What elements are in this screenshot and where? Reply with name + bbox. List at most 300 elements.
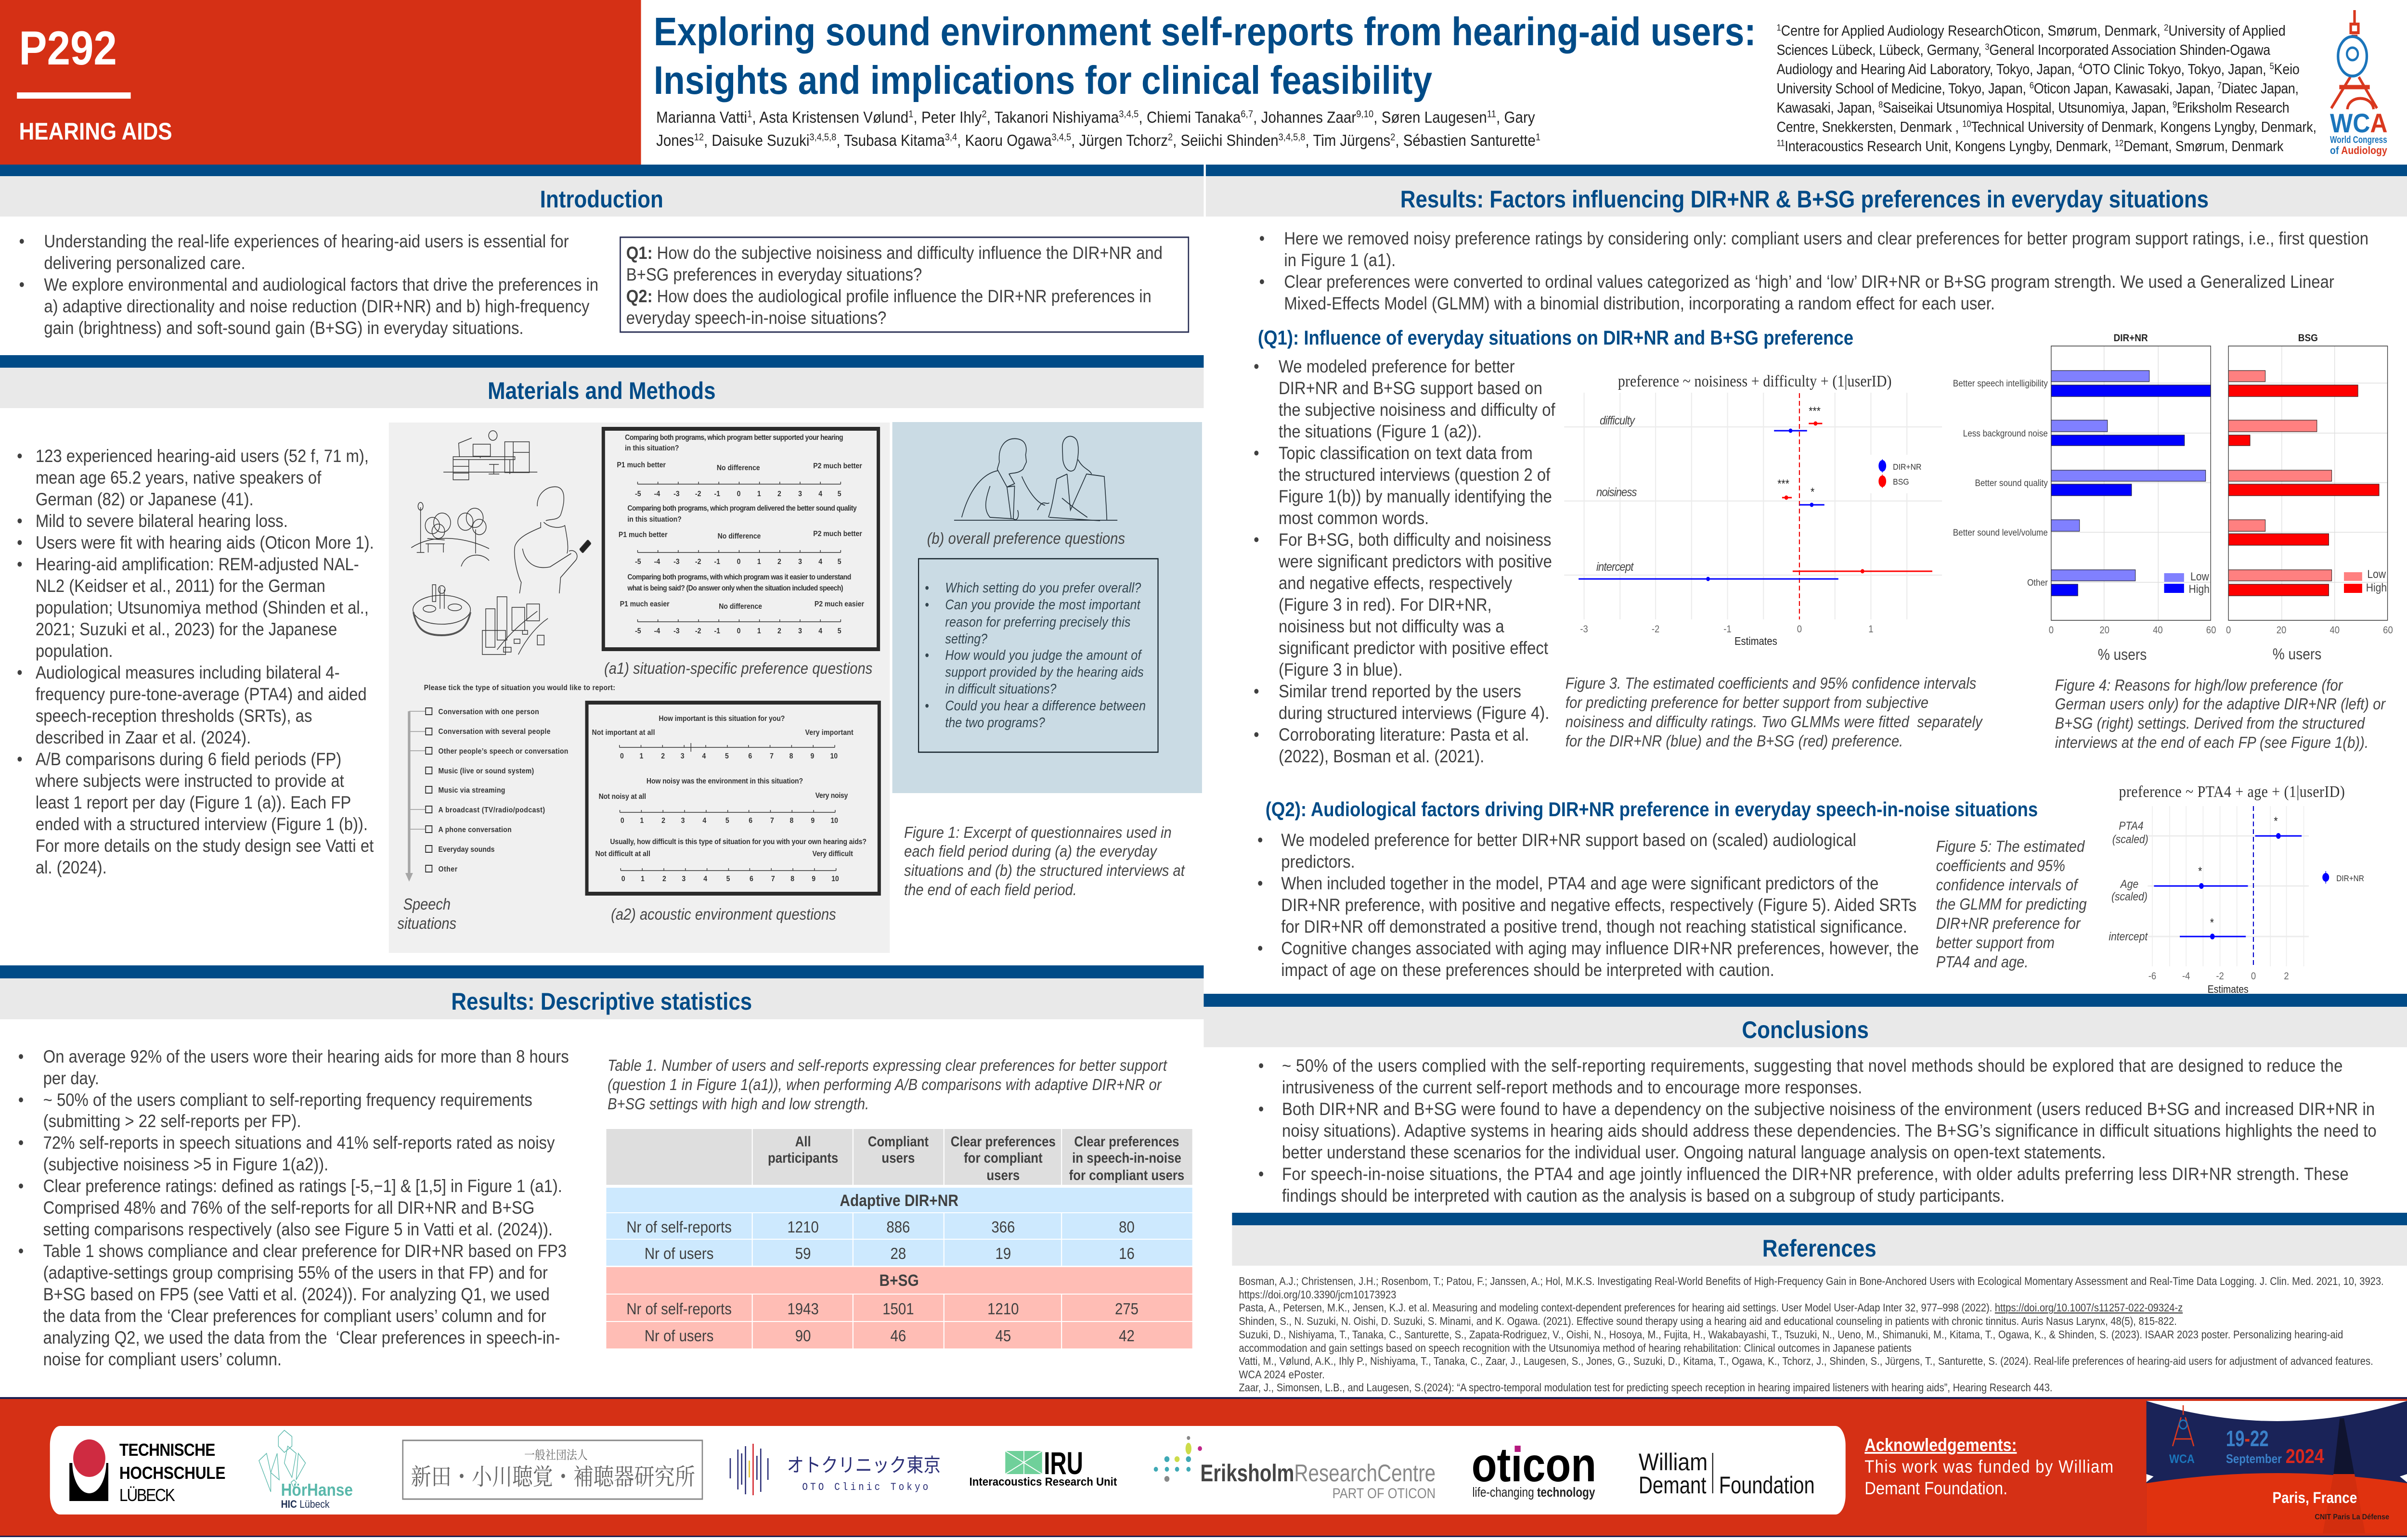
figure 1a: questionnaire panel (389, 423, 890, 953)
methods bullets: NL2 (Keidser et al., 2011) for the German (36, 576, 325, 596)
authors: Jones12, Daisuke Suzuki3,4,5,8, Tsubasa Kitama3,4, Kaoru Ogawa3,4,5, Jürgen Tchorz2, Seiichi Shinden3,4,5,8, Tim Jürgens2, Sébastien Santurette1 (656, 131, 1540, 149)
speech situation checklist: Conversation with several people (439, 727, 550, 736)
reference list: Vatti, M., Vølund, A.K., Ihly P., Nishiyama, T., Tanaka, C., Zaar, J., Laugesen, S., Jones, G., Suzuki, D., Kitama, T., Ogawa, K., Tchorz, J., Shinden, S., Jürgens, T., Santurette, S. (2024). Real-life preferences of hearing-aid users for adjustment of advanced features. (1239, 1355, 2373, 1367)
methods bullets: For more details on the study design see Vatti et (36, 836, 374, 856)
axis labels: -6 (2148, 971, 2156, 982)
questionnaire a1 frame: -1 (714, 489, 720, 498)
questionnaire a2 frame: 5 (726, 874, 730, 883)
logo: TH Lübeck: TECHNISCHE (119, 1440, 215, 1460)
caption b: (b) overall preference questions (927, 529, 1125, 547)
figure 4 caption: B+SG (right) settings. Derived from the structured (2055, 714, 2366, 732)
questionnaire a1 frame: 5 (838, 489, 841, 498)
table 1: Clear preferences (951, 1133, 1056, 1149)
questionnaire a1 frame: 2 (777, 489, 781, 498)
statistics bullets: Table 1 shows compliance and clear preference for DIR+NR based on FP3 (43, 1241, 567, 1261)
questionnaire a2 frame: How important is this situation for you? (659, 714, 785, 723)
row labels: (scaled) (2112, 833, 2148, 846)
figure 4 caption: interviews at the end of each FP (see Figure 1(b)). (2055, 733, 2368, 751)
questionnaire a2 frame: 8 (790, 874, 794, 883)
figure 5 caption: Figure 5: The estimated (1936, 837, 2085, 855)
questionnaire a1 frame: -3 (673, 627, 680, 635)
speech situation checklist: Other (439, 865, 457, 873)
questionnaire a1 frame: 4 (818, 627, 823, 635)
table 1: 1501 (882, 1300, 914, 1318)
icon: WCA congress logo: World Congress (2330, 134, 2387, 145)
logo: Eriksholm Research Centre: PART OF OTICON (1333, 1485, 1436, 1501)
table 1: Nr of users (645, 1327, 713, 1345)
table 1: 1210 (787, 1218, 819, 1236)
questionnaire a2 frame: 4 (703, 874, 708, 883)
Q1 bullets: noisiness but not difficulty was a (1279, 616, 1504, 636)
questionnaire a1 frame: 0 (737, 557, 740, 566)
table 1: 886 (886, 1218, 910, 1236)
conclusions bullets: For speech-in-noise situations, the PTA4 and age jointly influenced the DIR+NR preference, with older adults preferring less DIR+NR strength. These (1282, 1164, 2349, 1184)
chart: DIR+NR: 40 (2153, 625, 2163, 636)
questionnaire a1 frame: 1 (757, 489, 761, 498)
table 1 caption: Table 1. Number of users and self-reports expressing clear preferences for better support (608, 1056, 1167, 1074)
statistics bullets: • (18, 1133, 24, 1153)
label: speech situations (398, 895, 456, 932)
logo: TH Lübeck: LÜBECK (119, 1486, 175, 1505)
speech situation checklist (405, 683, 615, 882)
reference list (1239, 1275, 2384, 1394)
questionnaire a1 frame: -3 (673, 557, 680, 566)
congress banner (2147, 1401, 2407, 1533)
acknowledgements (1864, 1435, 2113, 1498)
axis labels: -3 (1580, 624, 1588, 635)
title: Insights and implications for clinical feasibility (654, 58, 1433, 103)
table 1 caption: B+SG settings with high and low strength. (608, 1095, 869, 1113)
estimates: noisiness: *** (1777, 477, 1789, 490)
Q2 bullets: for DIR+NR off demonstrated a positive trend, though not reaching statistical significance. (1281, 917, 1907, 937)
row labels: intercept (2109, 930, 2148, 943)
methods bullets: Hearing-aid amplification: REM-adjusted NAL- (36, 554, 359, 574)
figure 4 caption: German users only) for the adaptive DIR+NR (left) or (2055, 695, 2386, 713)
questionnaire a1 frame: P1 much better (617, 461, 666, 469)
Q2 bullets: • (1257, 830, 1263, 850)
questionnaire a2 frame: 9 (811, 816, 815, 825)
figure 4: reasons bar charts (1953, 333, 2393, 663)
questionnaire a2 frame: Usually, how difficult is this type of situation for you with your own hearing aids? (610, 837, 867, 846)
figure 5 caption (1936, 837, 2087, 971)
category labels: Other (2027, 577, 2048, 588)
overall preference question box: Which setting do you prefer overall? (945, 580, 1141, 595)
axis labels (2148, 971, 2289, 995)
questionnaire a1 frame: 1 (757, 557, 761, 566)
table 1 (606, 1129, 1192, 1348)
speech situation checklist: Please tick the type of situation you would like to report: (424, 683, 615, 692)
questionnaire a1 frame: what is being said? (Do answer only when the situation included speech) (627, 584, 843, 592)
methods bullets: Mild to severe bilateral hearing loss. (36, 511, 288, 531)
conclusions bullets: Both DIR+NR and B+SG were found to have a dependency on the subjective noisiness of the environment (users reduced B+SG and increased DIR+NR in (1282, 1099, 2375, 1119)
questionnaire a1 frame: 4 (818, 489, 823, 498)
axis labels: -2 (2216, 971, 2224, 982)
methods bullets: frequency pure-tone-average (PTA4) and aided (36, 684, 367, 704)
methods bullets: mean age 65.2 years, native speakers of (36, 468, 322, 488)
category labels: Better speech intelligibility (1953, 378, 2048, 388)
questionnaire a2 frame: 2 (661, 816, 665, 825)
overall preference question box: reason for preferring precisely this (945, 615, 1130, 629)
questionnaire a2 frame: Not difficult at all (595, 849, 650, 858)
congress banner: 2024 (2286, 1445, 2324, 1468)
questionnaire a2 frame: 6 (749, 816, 752, 825)
table 1: Adaptive DIR+NR (840, 1191, 958, 1209)
questionnaire a2 frame: 4 (702, 752, 706, 760)
questionnaire a2 frame: 10 (830, 816, 838, 825)
Q2 bullets: We modeled preference for better DIR+NR support based on (scaled) audiological (1281, 830, 1856, 850)
questionnaire a1 frame: -2 (695, 489, 701, 498)
table 1: 42 (1119, 1327, 1135, 1345)
Q1 bullets: and negative effects, respectively (1279, 573, 1513, 593)
questionnaire a2 frame: Not noisy at all (599, 792, 646, 801)
questionnaire a2 frame: 0 (621, 816, 624, 825)
table 1: 19 (996, 1245, 1011, 1262)
icon: two people in conversation (954, 436, 1117, 521)
speech situation checklist: Conversation with one person (439, 707, 539, 716)
results intro bullets: • (1259, 272, 1265, 292)
Q1 bullets: DIR+NR and B+SG support based on (1279, 378, 1542, 398)
heading: results factors: Results: Factors influencing DIR+NR & B+SG preferences in everyday situations (1400, 185, 2209, 213)
icon: dining table sketch (413, 585, 470, 635)
axis labels: Estimates (1734, 635, 1777, 647)
speech situation checklist: Everyday sounds (439, 845, 494, 854)
questionnaire a1 frame: 4 (818, 557, 823, 566)
conclusions bullets: better understand these scenarios for the individual user. Ongoing natural language analysis on open-text statements. (1282, 1142, 2106, 1162)
questionnaire a1 frame: -2 (695, 557, 701, 566)
estimates: difficulty: *** (1809, 405, 1821, 417)
statistics bullets: (subjective noisiness >5 in Figure 1(a2)). (43, 1155, 328, 1174)
questionnaire a1 frame: No difference (719, 602, 762, 611)
statistics bullets: On average 92% of the users wore their hearing aids for more than 8 hours (43, 1047, 569, 1066)
estimate: intercept (2180, 916, 2246, 939)
overall preference question box: How would you judge the amount of (945, 648, 1142, 663)
affiliations: 1Centre for Applied Audiology ResearchOticon, Smørum, Denmark, 2University of Applied (1776, 22, 2286, 39)
questionnaire a2 frame: 10 (830, 752, 838, 760)
axis labels: -1 (1723, 624, 1732, 635)
figure 5 caption: coefficients and 95% (1936, 857, 2065, 874)
methods bullets: • (17, 446, 23, 466)
figure 5 caption: PTA4 and age. (1936, 953, 2028, 971)
table 1: in speech-in-noise (1072, 1150, 1181, 1166)
logo: Eriksholm dots (1154, 1436, 1202, 1482)
chart: BSG: BSG (2298, 333, 2318, 344)
research questions box: Q1: How do the subjective noisiness and difficulty influence the DIR+NR and (626, 243, 1163, 263)
icon: WCA congress logo (2330, 10, 2388, 156)
methods bullets: • (17, 663, 23, 682)
questionnaire a2 frame: 4 (702, 816, 707, 825)
row labels: Age (2120, 878, 2138, 890)
methods bullets: • (17, 749, 23, 769)
reference list: Zaar, J., Simonsen, L.B., and Laugesen, S.(2024): “A spectro-temporal modulation test for predicting speech reception in hearing impaired listeners with hearing aids”, Hearing Research 443. (1239, 1381, 2052, 1394)
axis labels: Estimates (2208, 984, 2249, 995)
poster id panel: P292 (19, 22, 117, 75)
questionnaire a2 frame: 10 (831, 874, 839, 883)
axis labels: 1 (1868, 624, 1874, 635)
questionnaire a1 frame: P2 much better (813, 529, 862, 538)
methods bullets: speech-reception thresholds (SRTs), as (36, 706, 312, 726)
results intro bullets: Clear preferences were converted to ordinal values categorized as ‘high’ and ‘low’ DIR+NR or B+SG program strength. We used a Generalized Linear (1284, 272, 2334, 292)
estimate: age: * (2198, 865, 2202, 877)
table 1: All (795, 1133, 811, 1149)
questionnaire a2 frame: 6 (748, 752, 752, 760)
reference list: Pasta, A., Petersen, M.K., Jensen, K.J. et al. Measuring and modeling context-dependent preferences for hearing aid settings. User Model User-Adap Inter 32, 977–998 (2022). https://doi.org/10.1007/s11257-022-09324-z (1239, 1301, 2183, 1314)
panel: results factors (1206, 165, 2407, 995)
speech situation checklist: A broadcast (TV/radio/podcast) (439, 806, 545, 814)
poster id panel: HEARING AIDS (19, 117, 172, 145)
axis labels: 2 (2284, 971, 2289, 982)
affiliations: Centre, Snekkersten, Denmark , 10Technical University of Denmark, Kongens Lyngby, Denmark, (1776, 118, 2316, 135)
methods bullets: Users were fit with hearing aids (Oticon More 1). (36, 533, 374, 552)
model formula: preference ~ noisiness + difficulty + (1|userID) (1618, 372, 1892, 390)
questionnaire a2 frame: 1 (641, 874, 645, 883)
authors (656, 108, 1540, 149)
chart: DIR+NR: 60 (2206, 625, 2216, 636)
overall preference question box: • (925, 698, 929, 713)
logo: Interacoustics Research Unit: IRU (1044, 1446, 1083, 1481)
logo: Oticon: oticon (1472, 1438, 1596, 1491)
figure 1 caption: Figure 1: Excerpt of questionnaires used in (904, 823, 1172, 841)
logo: William Demant Foundation: Demant (1639, 1471, 1707, 1499)
statistics bullets: ~ 50% of the users compliant to self-reporting frequency requirements (43, 1090, 532, 1110)
questionnaire a1 frame: 0 (737, 489, 740, 498)
Q1 bullets: • (1254, 443, 1259, 463)
logo: OTO Clinic Tokyo (730, 1444, 941, 1495)
heading: conclusions: Conclusions (1742, 1016, 1869, 1043)
logo: Interacoustics Research Unit (970, 1446, 1117, 1488)
acknowledgements: Demant Foundation. (1864, 1478, 2007, 1498)
methods bullets: A/B comparisons during 6 field periods (FP) (36, 749, 341, 769)
table 1: for compliant (964, 1150, 1043, 1166)
results intro bullets: Here we removed noisy preference ratings by considering only: compliant users and clear preferences for better program support ratings, i.e., first question (1284, 229, 2368, 248)
small tower mark: WCA (2169, 1452, 2195, 1465)
reference list: accommodation and gain settings based on speech recognition with the Utsunomiya method of hearing rehabilitation: Clinical outcomes in Japanese patients (1239, 1342, 1912, 1354)
Q1 bullets: For B+SG, both difficulty and noisiness (1279, 530, 1551, 550)
category labels: Better sound level/volume (1953, 527, 2048, 538)
questionnaire a2 frame: 7 (770, 752, 774, 760)
Q2 bullets (1257, 830, 1919, 980)
Q2 bullets: When included together in the model, PTA4 and age were significant predictors of the (1281, 873, 1878, 893)
Q1 bullets: most common words. (1279, 508, 1429, 528)
figure 5 caption: better support from (1936, 934, 2055, 951)
methods bullets: • (17, 554, 23, 574)
intro bullets (19, 231, 598, 338)
figure 1 caption: each field period during (a) the everyday (904, 842, 1158, 860)
Q2 bullets: • (1257, 938, 1263, 958)
axis labels: 0 (2251, 971, 2256, 982)
figure 5 caption: confidence intervals of (1936, 876, 2079, 894)
category labels (1953, 378, 2048, 588)
questionnaire a1 frame: 3 (798, 627, 802, 635)
overall preference question box: support provided by the hearing aids (945, 665, 1144, 680)
questionnaire a1 frame: P1 much easier (620, 600, 670, 608)
questionnaire a2 frame: 1 (639, 752, 643, 760)
questionnaire a1 frame: -1 (714, 557, 720, 566)
logo: William Demant Foundation: William (1639, 1448, 1708, 1476)
speech situation checklist: Other people’s speech or conversation (439, 747, 568, 756)
logo: TH Lübeck: HOCHSCHULE (119, 1463, 225, 1483)
statistics bullets: • (18, 1090, 24, 1110)
research questions box (620, 237, 1189, 332)
table 1: 45 (996, 1327, 1011, 1345)
small tower mark (2169, 1405, 2195, 1465)
estimates: noisiness: * (1811, 486, 1814, 498)
panel: materials and methods (0, 355, 1204, 953)
methods bullets: al. (2024). (36, 858, 107, 877)
legend: BSG (1893, 477, 1909, 487)
Q1 bullets: We modeled preference for better (1279, 357, 1515, 376)
chart: BSG: Low (2367, 568, 2386, 580)
research questions box: B+SG preferences in everyday situations? (626, 265, 922, 284)
statistics bullets: Comprised 48% and 76% of the self-reports for all DIR+NR and B+SG (43, 1198, 534, 1218)
table 1: 28 (891, 1245, 906, 1262)
questionnaire a1 frame: P2 much easier (815, 600, 864, 608)
logo: OTO Clinic Tokyo: オトクリニック東京 (787, 1454, 941, 1476)
logo strip (50, 1426, 1846, 1514)
icon: city traffic sketch (482, 597, 548, 654)
questionnaire a2 frame: 7 (770, 816, 774, 825)
speech situation checklist: A phone conversation (439, 825, 512, 834)
questionnaire a2 frame: 6 (750, 874, 753, 883)
questionnaire a1 frame: in this situation? (627, 515, 682, 524)
acknowledgements: Acknowledgements: (1864, 1435, 2017, 1455)
chart: DIR+NR: 0 (2049, 625, 2054, 636)
statistics bullets: • (18, 1047, 24, 1066)
table 1: 275 (1115, 1300, 1139, 1318)
chart: BSG: 40 (2329, 625, 2340, 636)
figure 4 caption (2055, 676, 2386, 751)
Q2 bullets: Cognitive changes associated with aging may influence DIR+NR preferences, however, the (1281, 938, 1919, 958)
speech situation checklist: Music via streaming (439, 786, 505, 795)
overall preference question box: Could you hear a difference between (945, 698, 1146, 713)
Q2 bullets: • (1257, 873, 1263, 893)
statistics bullets: analyzing Q2, we used the data from the ‘Clear preferences in speech-in- (43, 1328, 560, 1348)
axis labels (1580, 624, 1874, 647)
results intro bullets: in Figure 1 (a1). (1284, 250, 1396, 270)
questionnaire a1 frame (603, 429, 879, 649)
chart: BSG: 0 (2226, 625, 2231, 636)
results intro bullets: Mixed-Effects Model (GLMM) with a binomial distribution, incorporating a random effect for each user. (1284, 294, 1995, 313)
questionnaire a2 frame: How noisy was the environment in this situation? (647, 777, 803, 785)
chart: BSG: 60 (2383, 625, 2393, 636)
estimates: noisiness (1777, 477, 1825, 507)
category labels: Better sound quality (1975, 477, 2048, 488)
overall preference question box: in difficult situations? (945, 681, 1056, 696)
methods bullets (17, 446, 374, 877)
methods bullets: ended with a structured interview (Figure 1 (b)). (36, 814, 368, 834)
acknowledgements: This work was funded by William (1864, 1457, 2113, 1476)
legend: DIR+NR (1893, 462, 1921, 472)
Q1 bullets: • (1254, 530, 1259, 550)
statistics bullets: • (18, 1176, 24, 1196)
questionnaire a1 frame: 2 (777, 627, 781, 635)
legend (2322, 871, 2364, 884)
table 1: Nr of self-reports (626, 1300, 732, 1318)
conclusions bullets: intrusiveness of the current self-report methods and to encourage more responses. (1282, 1078, 1862, 1097)
methods bullets: population. (36, 641, 113, 661)
statistics bullets: 72% self-reports in speech situations and 41% self-reports rated as noisy (43, 1133, 555, 1153)
model formula: preference ~ PTA4 + age + (1|userID) (2119, 782, 2345, 800)
reference list: Bosman, A.J.; Christensen, J.H.; Rosenbom, T.; Patou, F.; Janssen, A.; Hol, M.K.S. Investigating Real-World Benefits of High-Frequency Gain in Bone-Anchored Users with Ecological Momentary Assessment and Real-Time Data Logging. J. Clin. Med. 2021, 10, 3923. (1239, 1275, 2384, 1287)
figure 3 caption: Figure 3. The estimated coefficients and 95% confidence intervals (1566, 674, 1976, 692)
legend (1870, 455, 1925, 493)
estimate: age (2154, 865, 2248, 889)
figure 3: coefficient plot: difficulty (1600, 414, 1635, 427)
logo: HörHanse: HIC Lübeck (281, 1499, 330, 1510)
Q1 bullets: significant predictor with positive effect (1279, 638, 1548, 658)
questionnaire a1 frame: 3 (798, 489, 802, 498)
axis labels: -4 (2182, 971, 2190, 982)
intro bullets: Understanding the real-life experiences of hearing-aid users is essential for (44, 231, 569, 251)
legend: DIR+NR (2336, 874, 2364, 883)
conclusions bullets: • (1258, 1099, 1264, 1119)
questionnaire a2 frame: Very noisy (815, 791, 848, 800)
chart: DIR+NR (2049, 333, 2216, 663)
statistics bullets: • (18, 1241, 24, 1261)
questionnaire a2 frame: 8 (789, 752, 793, 760)
logo: Oticon: life-changing technology (1473, 1485, 1595, 1500)
chart: DIR+NR: 20 (2099, 625, 2109, 636)
logo: William Demant Foundation (1639, 1448, 1815, 1499)
overall preference question box: the two programs? (945, 715, 1045, 730)
affiliations: Audiology and Hearing Aid Laboratory, Tokyo, Japan, 4OTO Clinic Tokyo, Tokyo, Japan, 5Keio (1776, 61, 2300, 77)
table 1: Compliant (868, 1133, 929, 1149)
statistics bullets: (adaptive-settings group comprising 55% of the users in that FP) and for (43, 1263, 548, 1283)
questionnaire a1 frame: -4 (654, 627, 660, 635)
title: Exploring sound environment self-reports from hearing-aid users: (654, 9, 1756, 54)
statistics bullets (18, 1047, 569, 1369)
affiliations: Kawasaki, Japan, 8Saiseikai Utsunomiya Hospital, Utsunomiya, Japan, 9Eriksholm Research (1776, 99, 2290, 116)
overall preference question box: setting? (945, 631, 987, 646)
questionnaire a1 frame: -4 (654, 557, 660, 566)
heading: introduction: Introduction (540, 185, 663, 213)
Q1 bullets: Topic classification on text data from (1279, 443, 1533, 463)
questionnaire a1 frame: Comparing both programs, which program delivered the better sound quality (627, 504, 857, 513)
chart: DIR+NR: High (2188, 583, 2210, 595)
affiliations: 11Interacoustics Research Unit, Kongens Lyngby, Denmark, 12Demant, Smørum, Denmark (1776, 138, 2284, 154)
subheading: Q2: (Q2): Audiological factors driving DIR+NR preference in everyday speech-in-noise situations (1266, 799, 2038, 821)
methods bullets: 2021; Suzuki et al., 2023) for the Japanese (36, 619, 337, 639)
conclusions bullets: ~ 50% of the users complied with the self-reporting requirements, suggesting that novel methods should be explored that are designed to reduce the (1282, 1056, 2342, 1076)
icon: park sketch (411, 502, 489, 566)
figure 4 caption: Figure 4: Reasons for high/low preference (for (2055, 676, 2343, 694)
questionnaire a2 frame: 1 (640, 816, 644, 825)
research questions box: everyday speech-in-noise situations? (626, 308, 886, 328)
methods bullets: least 1 report per day (Figure 1 (a)). Each FP (36, 793, 351, 812)
table 1: 1943 (787, 1300, 819, 1318)
Q1 bullets: during structured interviews (Figure 4). (1279, 703, 1549, 723)
poster id panel (0, 0, 641, 165)
statistics bullets: the data from the ‘Clear preferences for compliant users’ column and for (43, 1306, 546, 1326)
row labels: PTA4 (2119, 820, 2144, 832)
table 1: users (986, 1167, 1020, 1183)
Q1 bullets: (Figure 3 in blue). (1279, 660, 1402, 680)
questionnaire a2 frame: Not important at all (592, 728, 655, 737)
questionnaire a2 frame: 0 (620, 752, 624, 760)
Q1 bullets: • (1254, 725, 1259, 744)
questionnaire a1 frame: -5 (635, 489, 641, 498)
figure 3: coefficient plot: intercept (1596, 560, 1634, 573)
questionnaire a2 frame: 7 (771, 874, 775, 883)
questionnaire a2 frame: 2 (661, 752, 665, 760)
research questions box: Q2: How does the audiological profile influence the DIR+NR preferences in (626, 286, 1152, 306)
table 1: 80 (1119, 1218, 1135, 1236)
chart: DIR+NR: Low (2190, 570, 2209, 583)
questionnaire a1 frame: -1 (714, 627, 720, 635)
panel: references (1232, 1213, 2407, 1394)
heading: references: References (1762, 1234, 1876, 1262)
questionnaire a2 frame: Very important (805, 728, 854, 737)
chart: BSG: 20 (2277, 625, 2286, 636)
